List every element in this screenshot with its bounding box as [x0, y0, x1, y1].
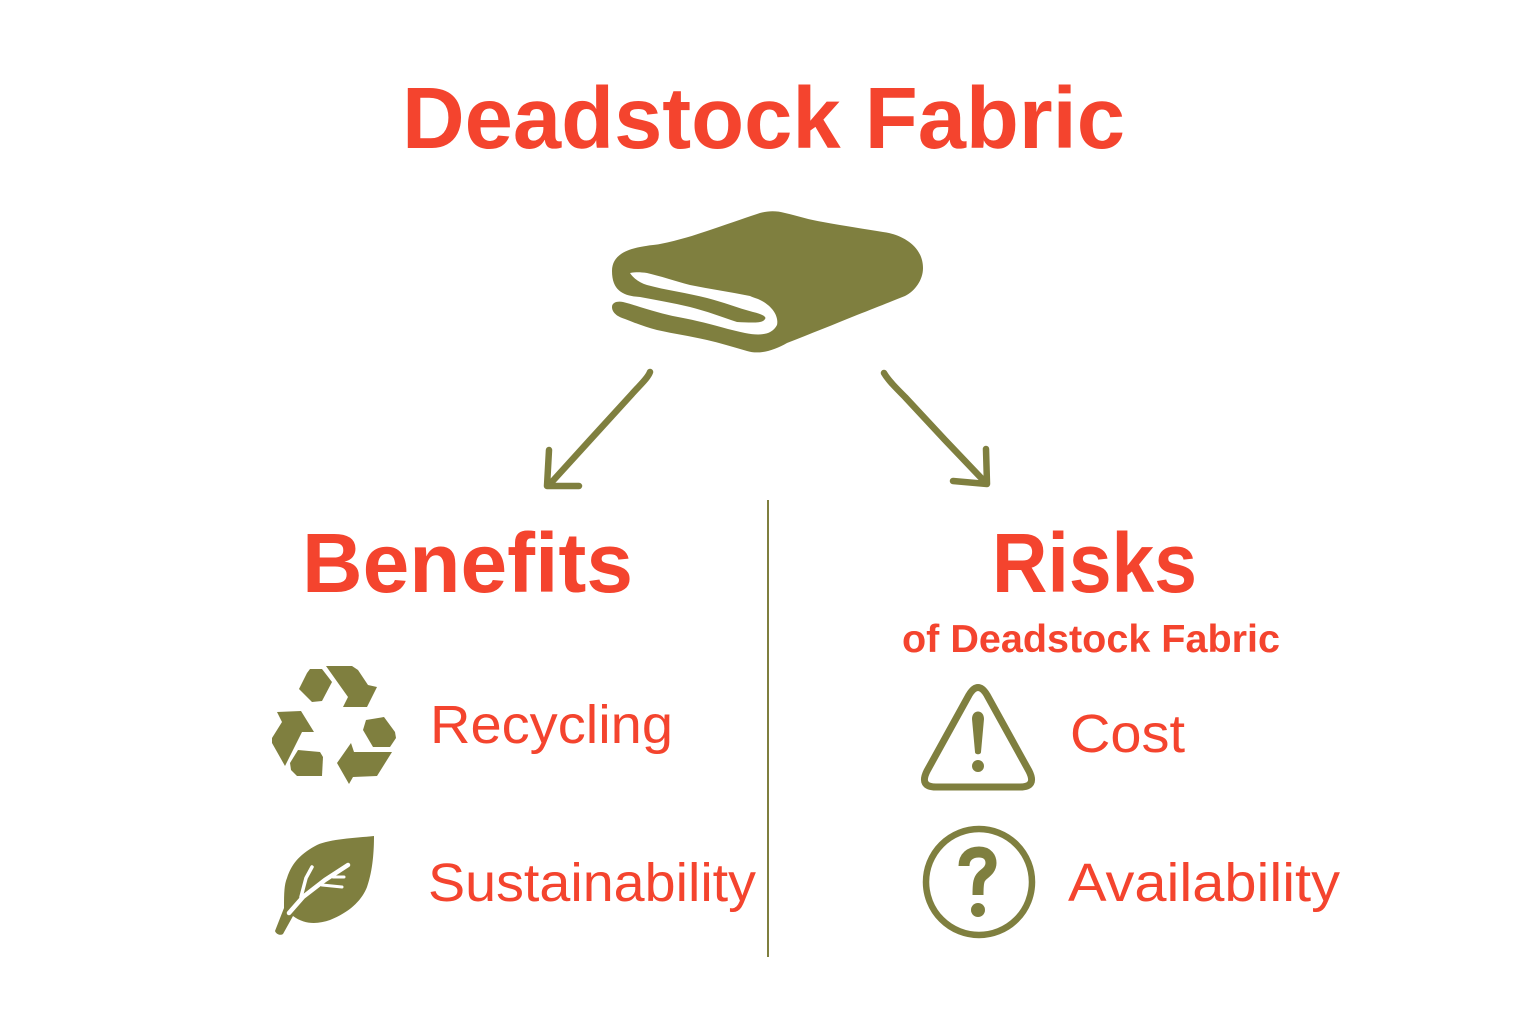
arrow: to risks	[884, 373, 987, 484]
subheading: of deadstock fabric: of Deadstock Fabric	[902, 618, 1280, 661]
panel: risks	[902, 516, 1340, 935]
title: Deadstock Fabric	[402, 70, 1125, 167]
arrow: to benefits	[547, 372, 650, 486]
icon: leaf	[275, 836, 374, 935]
heading: benefits: Benefits	[302, 516, 633, 610]
icon: folded fabric	[612, 211, 923, 352]
icon: question mark circle	[926, 829, 1032, 935]
icon: recycling	[272, 666, 396, 784]
panel: benefits	[272, 516, 756, 935]
icon: warning triangle	[924, 688, 1032, 787]
label: cost: Cost	[1070, 704, 1185, 764]
label: recycling: Recycling	[430, 695, 673, 755]
center divider	[767, 500, 769, 957]
label: availability: Availability	[1068, 853, 1340, 913]
label: sustainability: Sustainability	[428, 853, 756, 913]
heading: risks: Risks	[992, 516, 1197, 610]
